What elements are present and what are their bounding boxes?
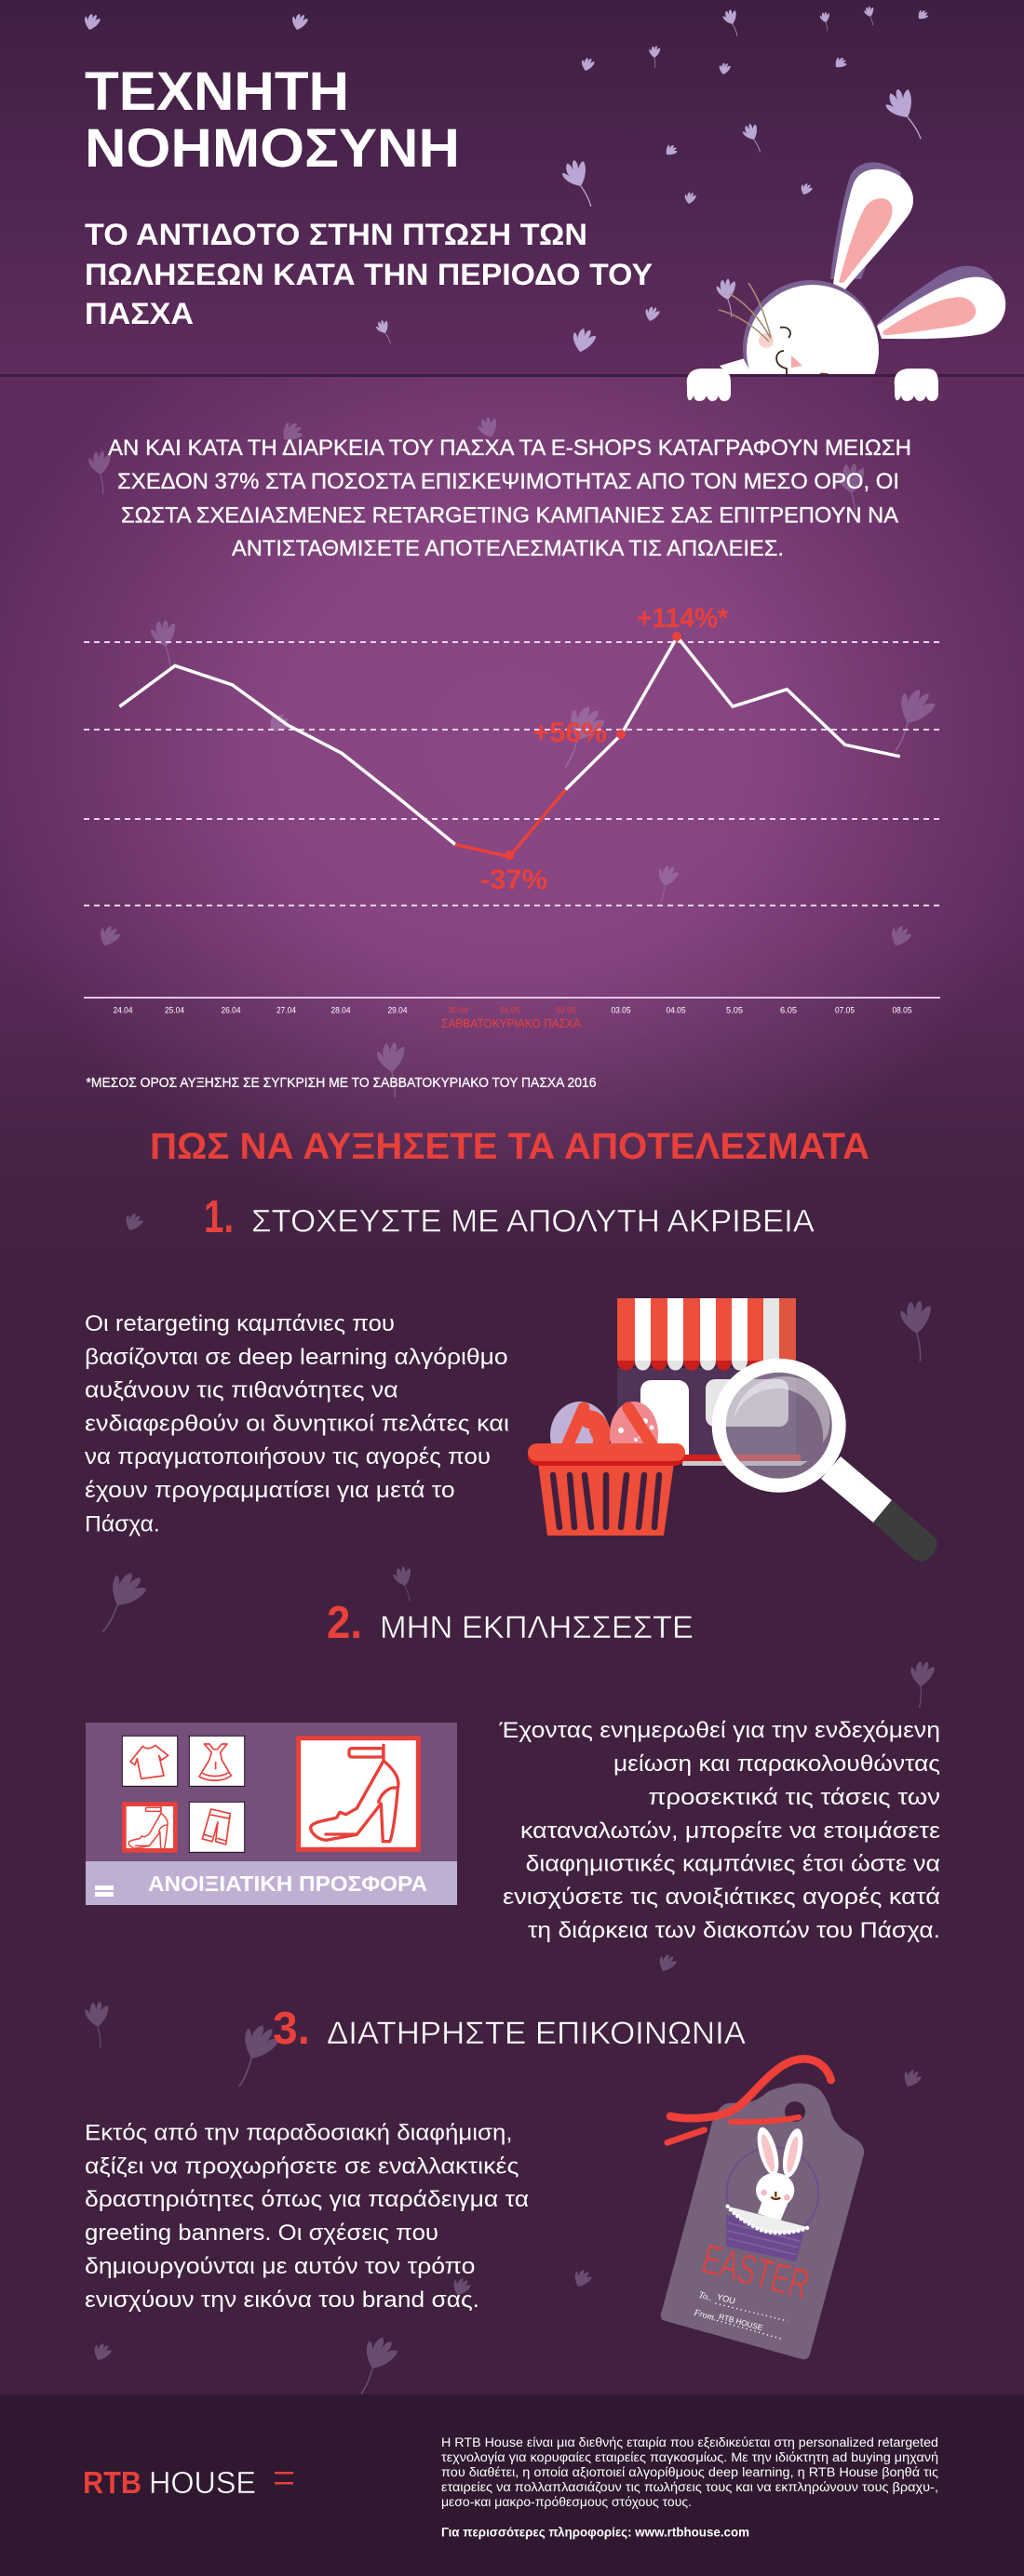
intro paragraph: ΑΝ ΚΑΙ ΚΑΤΑ ΤΗ ΔΙΑΡΚΕΙΑ ΤΟΥ ΠΑΣΧΑ ΤΑ E-SHOPS ΚΑΤΑΓΡΑΦΟΥΝ ΜΕΙΩΣΗ [108,436,911,461]
shelf divider [0,374,1024,377]
subtitle [85,218,653,330]
faded petals: middle and lower area [85,415,938,2399]
date labels: 07.05 [835,1005,855,1016]
company description: που διαθέτει, η οποία αξιοποιεί αλγορίθμους deep learning, η RTB House βοηθά τις [441,2465,939,2479]
step 1 text: βασίζονται σε deep learning αλγόριθμο [85,1345,508,1370]
step 2 product panel [86,1723,457,1905]
date labels: 01.05 [501,1005,519,1016]
company description: τεχνολογία για κορυφαίες εταιρείες παγκοσμίως. Με την ιδιόκτητη ad buying μηχανή [441,2450,938,2464]
RTB House logo: RTB [83,2465,141,2500]
product card: dress [189,1736,245,1786]
chart footnote: *ΜΕΣΟΣ ΟΡΟΣ ΑΥΞΗΣΗΣ ΣΕ ΣΥΓΚΡΙΣΗ ΜΕ ΤΟ ΣΑΒΒΑΤΟΚΥΡΙΑΚΟ ΤΟΥ ΠΑΣΧΑ 2016 [86,1075,596,1091]
step 3 text: δημιουργούνται με αυτόν τον τρόπο [85,2254,475,2279]
tag recipient: RTB HOUSE [718,2312,764,2332]
tag recipient: YOU [716,2292,736,2306]
title: ΤΕΧΝΗΤΗ [85,61,349,122]
tag title: EASTER [697,2234,815,2309]
product card: t-shirt [122,1736,178,1786]
step 3 text: αξίζει να προχωρήσετε σε εναλλακτικές [85,2153,519,2180]
step 2 heading: ΜΗΝ ΕΚΠΛΗΣΣΕΣΤΕ [380,1610,694,1645]
subtitle: ΠΩΛΗΣΕΩΝ ΚΑΤΑ ΤΗΝ ΠΕΡΙΟΔΟ ΤΟΥ [85,258,653,291]
step 3 heading: ΔΙΑΤΗΡΗΣΤΕ ΕΠΙΚΟΙΝΩΝΙΑ [327,2016,746,2051]
large selected shoe [299,1738,418,1849]
step 2 text: καταναλωτών, μπορείτε να ετοιμάσετε [520,1818,940,1844]
illustration: shop, basket and magnifier [528,1298,936,1561]
dotted write-in lines [715,2303,788,2339]
step 1 heading: ΣΤΟΧΕΥΣΤΕ ΜΕ ΑΠΟΛΥΤΗ ΑΚΡΙΒΕΙΑ [251,1204,815,1240]
step 3 text [85,2120,529,2313]
menu icon [95,1885,114,1897]
eggs in basket [550,1402,658,1469]
date labels [114,1005,912,1016]
title: ΝΟΗΜΟΣΥΝΗ [85,118,460,179]
step 3 text: greeting banners. Οι σχέσεις που [85,2220,438,2246]
step 3 text: δραστηριότητες όπως για παράδειγμα τα [85,2187,529,2212]
date labels: 30.04 [449,1005,467,1016]
step 3 text: ενισχύουν την εικόνα του brand σας. [85,2288,479,2313]
basket [528,1443,685,1536]
bunny illustration [0,162,1024,417]
step 1 text: Οι retargeting καμπάνιες που [85,1311,395,1336]
value labels [480,603,728,895]
company description: Για περισσότερες πληροφορίες: www.rtbhouse.com [441,2526,749,2539]
date labels: 27.04 [276,1005,296,1016]
date labels: 03.05 [611,1005,631,1016]
date labels: 02.05 [557,1005,575,1016]
company description: μεσο-και μακρο-πρόθεσμους στόχους τους. [441,2495,692,2509]
intro paragraph [108,436,911,561]
white trend line [119,665,455,844]
intro paragraph: ΑΝΤΙΣΤΑΘΜΙΣΕΤΕ ΑΠΟΤΕΛΕΣΜΑΤΙΚΑ ΤΙΣ ΑΠΩΛΕΙΕΣ. [232,536,784,561]
RTB House logo [83,2465,293,2500]
footer band [0,2395,1024,2576]
subtitle: ΤΟ ΑΝΤΙΔΟΤΟ ΣΤΗΝ ΠΤΩΣΗ ΤΩΝ [85,218,587,251]
product card: selected shoe [124,1805,175,1850]
shop [617,1298,808,1466]
panel background [86,1723,457,1861]
product card: trousers [189,1802,245,1852]
step 2 text: ενισχύσετε τις ανοιξιάτικες αγορές κατά [503,1885,940,1910]
value labels: -37% [480,865,547,895]
step 2 text: μείωση και παρακολουθώντας [613,1751,940,1777]
company description: Η RTB House είναι μια διεθνής εταιρία που εξειδικεύεται στη personalized retargeted [441,2435,938,2449]
value labels: +56% [532,718,607,748]
intro paragraph: ΣΩΣΤΑ ΣΧΕΔΙΑΣΜΕΝΕΣ RETARGETING ΚΑΜΠΑΝΙΕΣ ΣΑΣ ΕΠΙΤΡΕΠΟΥΝ ΝΑ [121,503,898,529]
step 2 text: Έχοντας ενημερωθεί για την ενδεχόμενη [498,1718,940,1743]
date labels: 5.05 [726,1005,743,1016]
date labels: 04.05 [667,1005,685,1016]
step 2 text: προσεκτικά τις τάσεις των [648,1785,940,1810]
line chart [84,603,940,1030]
date labels: 29.04 [387,1005,408,1016]
illustration: Easter gift tag [661,2059,864,2359]
chart axis [84,997,940,999]
step 1 text: να πραγματοποιήσουν τις αγορές που [85,1444,491,1469]
date labels: 24.04 [114,1005,132,1016]
ribbon [667,2059,831,2142]
rabbit face [719,283,830,376]
company description [441,2435,939,2539]
basket [726,2207,808,2261]
step 3 text: Εκτός από την παραδοσιακή διαφήμιση, [85,2120,512,2146]
basket handle [727,2147,818,2239]
value labels: +114%* [637,603,728,634]
step 2 text: διαφημιστικές καμπάνιες έτσι ώστε να [525,1852,940,1876]
step 1 heading [204,1192,815,1242]
step 2 heading [327,1598,694,1648]
section heading: ΠΩΣ ΝΑ ΑΥΞΗΣΕΤΕ ΤΑ ΑΠΟΤΕΛΕΣΜΑΤΑ [150,1126,869,1167]
tag recipient [692,2290,764,2332]
step 2 heading: 2. [327,1598,362,1648]
tag bunny [753,2125,806,2221]
offer band [86,1861,457,1905]
rabbit paws [687,369,938,401]
tag recipient: From. [692,2307,718,2324]
step 2 text: τη διάρκεια των διακοπών του Πάσχα. [528,1918,940,1943]
magnifier [719,1365,936,1561]
red Easter weekend segment [455,789,566,857]
falling petals: top area [82,6,930,356]
step 1 text: αυξάνουν τις πιθανότητες να [85,1377,398,1403]
date labels: 08.05 [892,1005,912,1016]
step 1 text: ενδιαφερθούν οι δυνητικοί πελάτες και [85,1411,509,1437]
step 1 text [85,1311,509,1537]
tag recipient: To.. [697,2290,713,2303]
step 1 text: Πάσχα. [85,1511,160,1537]
step 3 heading [273,2004,746,2054]
date labels: 28.04 [331,1005,350,1016]
company description: εταιρείες να πολλαπλασιάζουν τις πωλήσεις τους και να εκπληρώνουν τους βραχυ-, [441,2480,938,2494]
Easter weekend axis label: ΣΑΒΒΑΤΟΚΥΡΙΑΚΟ ΠΑΣΧΑ [441,1016,581,1030]
step 3 heading: 3. [273,2004,310,2054]
tag hole [785,2101,805,2122]
step 1 heading: 1. [204,1192,234,1242]
title [85,61,460,179]
white trend line after Easter [566,637,900,789]
subtitle: ΠΑΣΧΑ [85,297,194,330]
step 1 text: έχουν προγραμματίσει για μετά το [85,1478,455,1503]
chart glow [0,376,1024,1228]
rabbit ears and head [720,162,1005,374]
intro paragraph: ΣΧΕΔΟΝ 37% ΣΤΑ ΠΟΣΟΣΤΑ ΕΠΙΣΚΕΨΙΜΟΤΗΤΑΣ ΑΠΟ ΤΟΝ ΜΕΣΟ ΟΡΟ, ΟΙ [117,469,899,494]
date labels: 26.04 [222,1005,240,1016]
tag body [661,2084,864,2359]
date labels: 6.05 [780,1005,797,1016]
offer band text: ΑΝΟΙΞΙΑΤΙΚΗ ΠΡΟΣΦΟΡΑ [148,1872,427,1896]
data point markers [505,632,681,860]
RTB House logo: HOUSE [149,2465,256,2500]
step 2 text [498,1718,940,1943]
date labels: 25.04 [165,1005,184,1016]
